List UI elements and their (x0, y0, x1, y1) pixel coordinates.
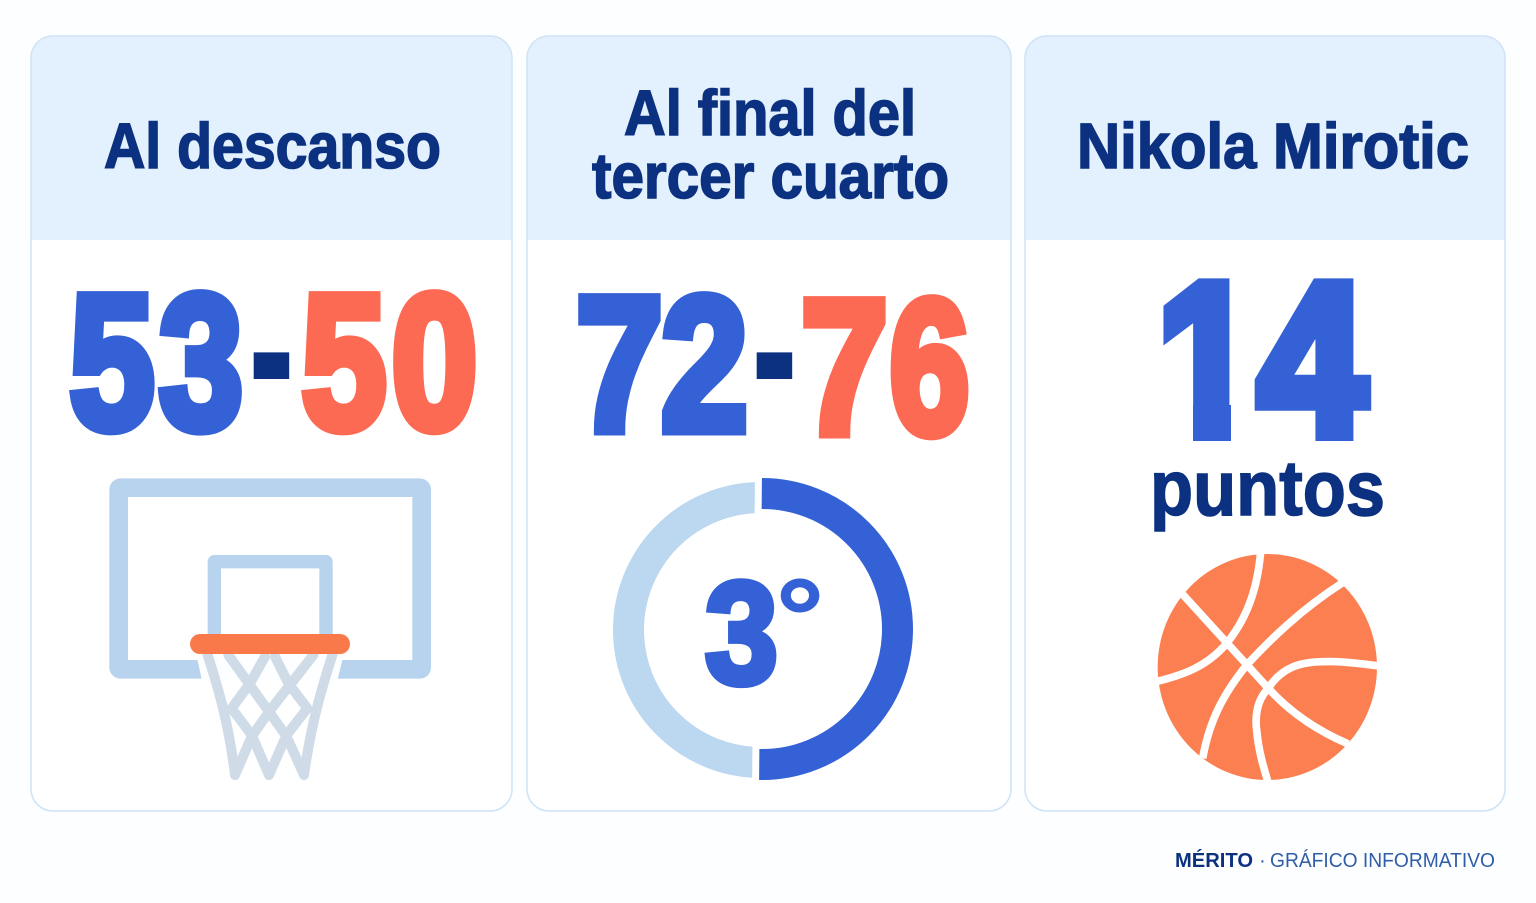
score: 72-76: 6 (890, 261, 970, 474)
icon: basketball hoop (119, 488, 422, 775)
score: 72-76: 7 (801, 261, 888, 474)
score: 53-50: 5 (302, 256, 386, 469)
heading: al descanso: Al descanso (104, 110, 441, 182)
stat: 14 (1150, 238, 1366, 480)
score: 72-76: 7 (576, 258, 663, 471)
heading: nikola mirotic: Nikola Mirotic (1077, 110, 1469, 182)
icon: basketball (1156, 552, 1379, 783)
score: 53-50: 3 (159, 256, 243, 469)
heading: al final del tercer cuarto (592, 77, 949, 212)
footer credit: MÉRITO (1175, 849, 1253, 872)
heading: al final del tercer cuarto: tercer cuarto (592, 140, 949, 212)
footer credit: GRÁFICO INFORMATIVO (1270, 849, 1495, 872)
score: 53-50: - (250, 244, 293, 456)
chart: third quarter progress ring (626, 494, 898, 764)
score: 72-76 (576, 244, 970, 474)
panel: al descanso (31, 36, 512, 811)
score: 72-76: 2 (661, 258, 748, 471)
score: 53-50: 5 (70, 256, 154, 469)
score: 53-50: 0 (392, 256, 478, 469)
score: 72-76: - (753, 244, 796, 456)
panel: nikola mirotic (1025, 36, 1505, 811)
ring label: third quarter: 3 (705, 552, 778, 714)
stat label: puntos: puntos (1150, 444, 1385, 532)
footer credit: · (1259, 849, 1266, 872)
ring label: third quarter: ° (776, 556, 824, 677)
heading: al final del tercer cuarto: Al final del (624, 77, 916, 149)
stat: 14: 1 (1157, 238, 1257, 480)
panel: al final del tercer cuarto (527, 36, 1011, 811)
score: 53-50 (70, 244, 478, 469)
footer credit (1175, 849, 1495, 872)
ring label: third quarter (705, 552, 824, 714)
stat: 14: 4 (1258, 238, 1366, 480)
